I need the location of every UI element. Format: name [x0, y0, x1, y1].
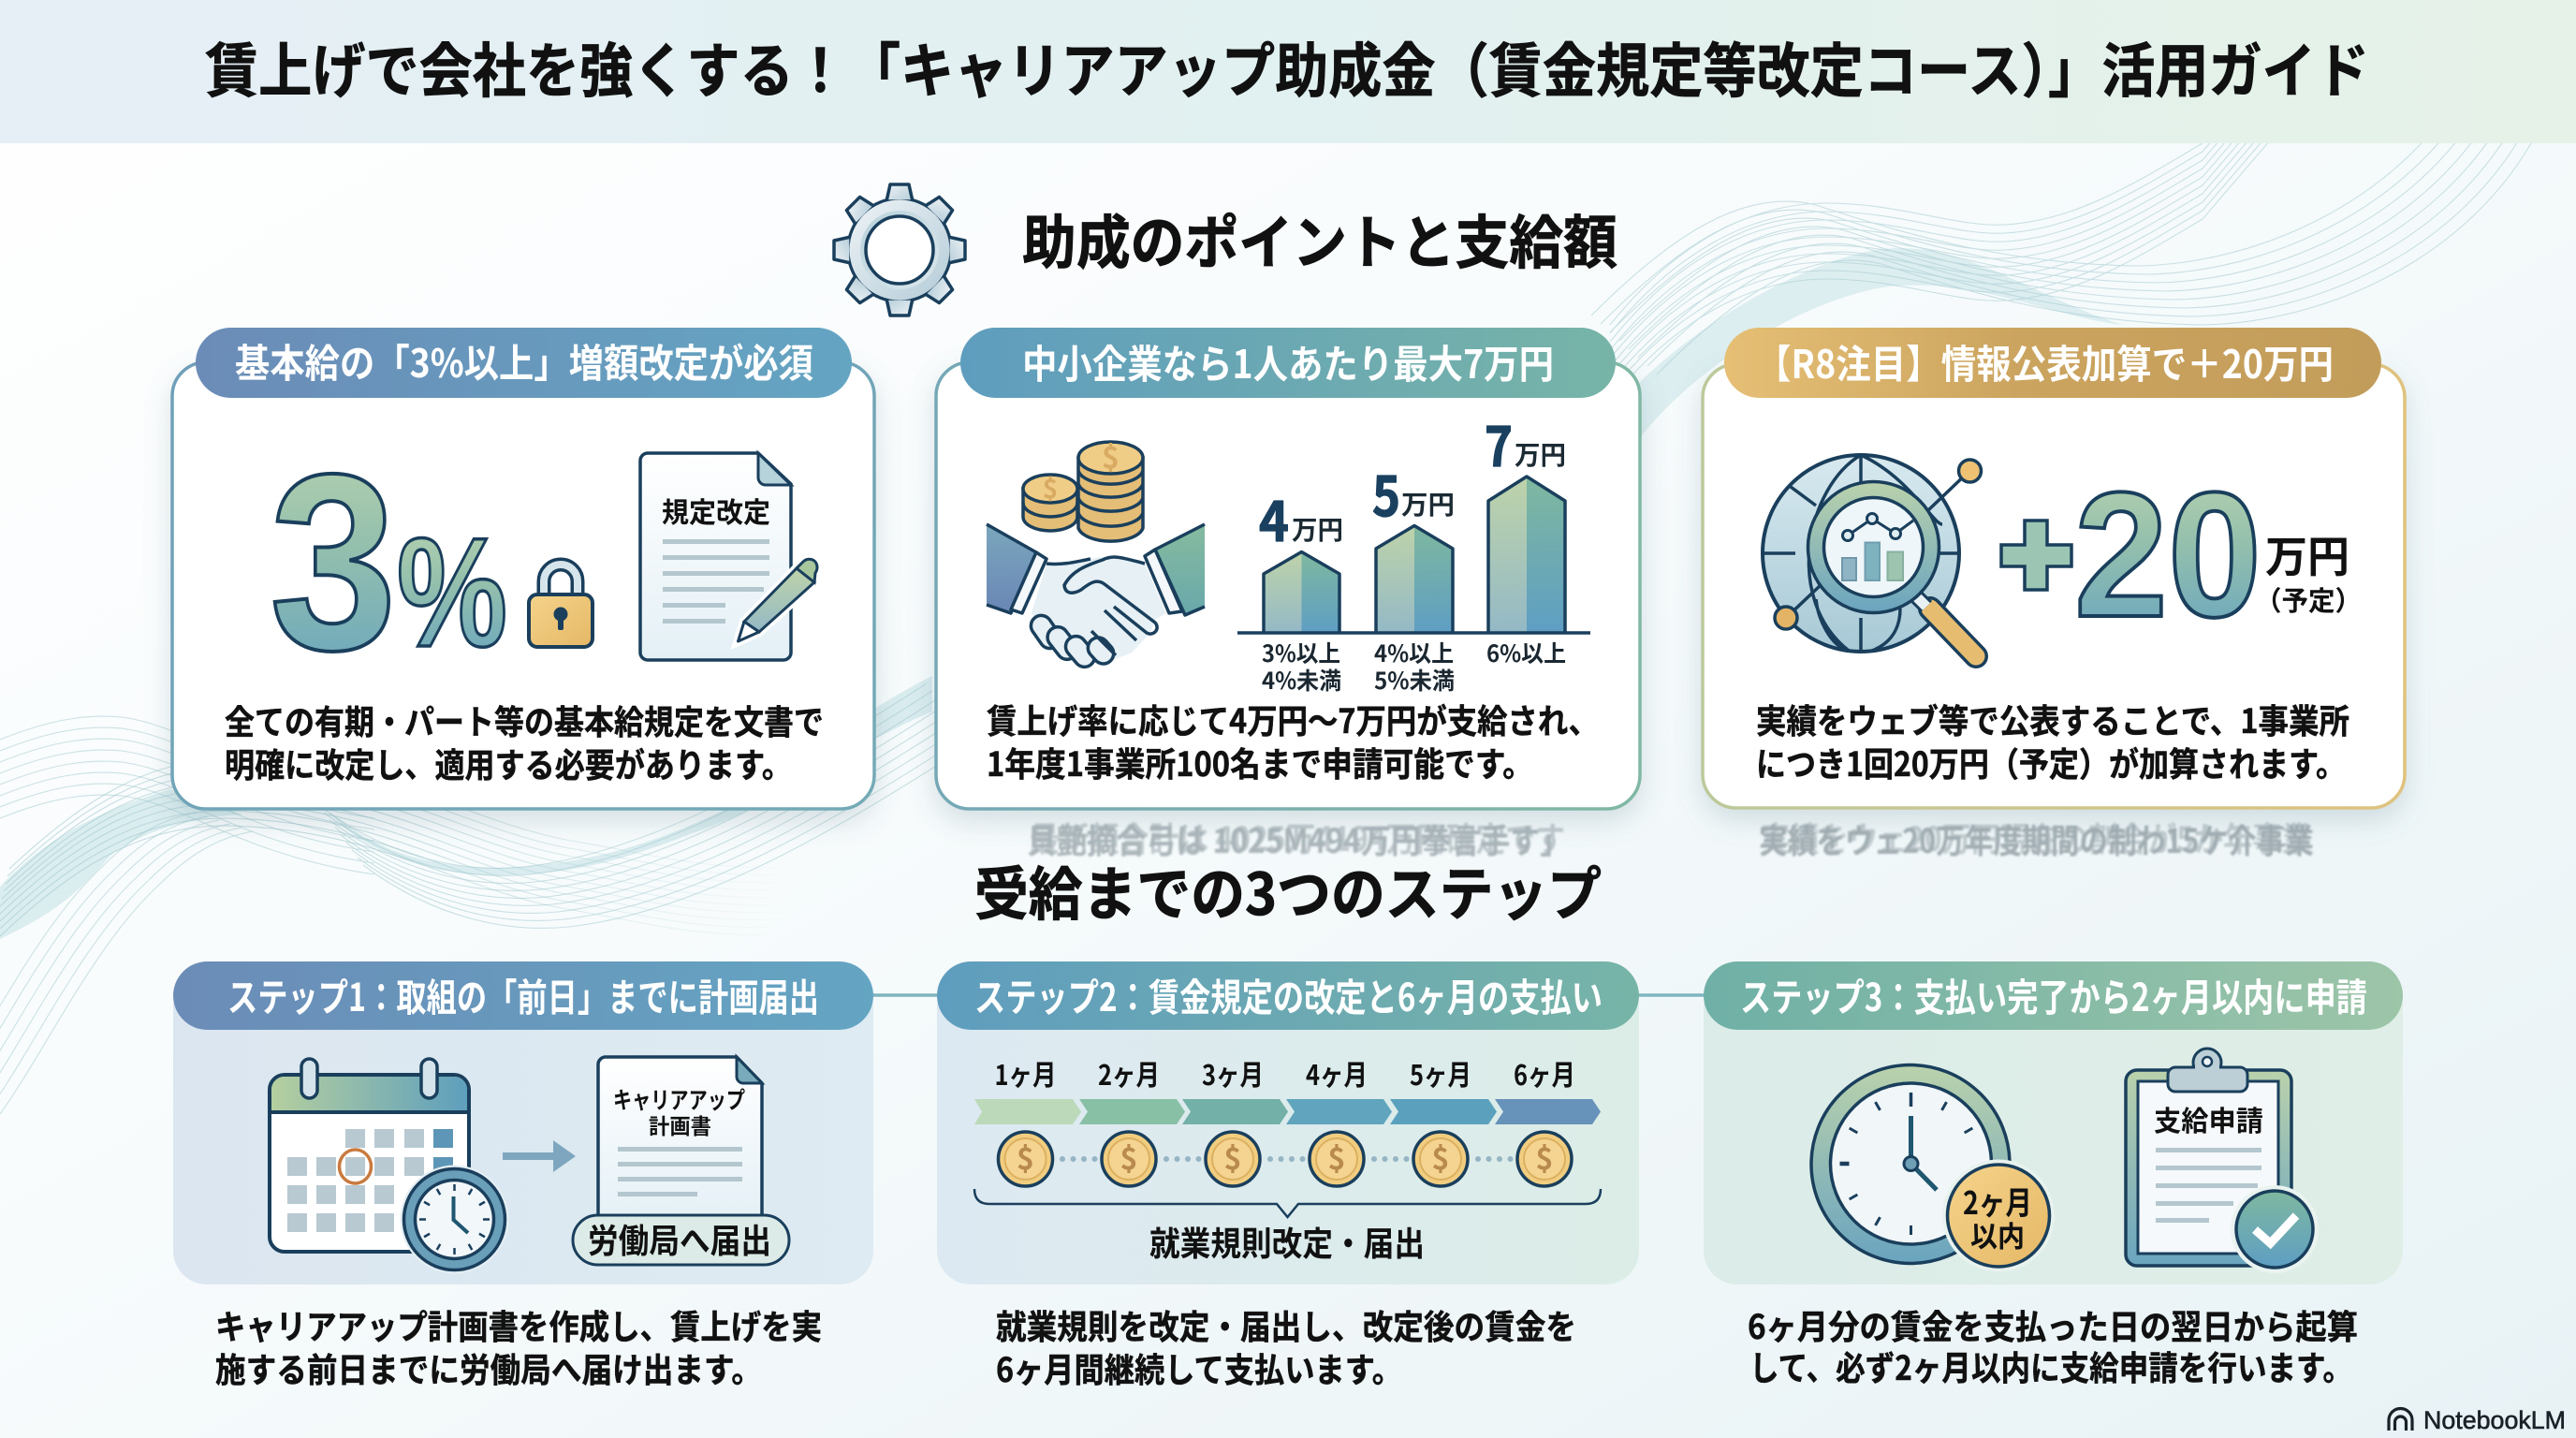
ghost text under card 3: 実績をウェ20万円現在の割合が5か年事業	[1761, 813, 2311, 861]
icon: application clipboard: 支給申請	[2154, 1098, 2263, 1139]
card 3 heading pill: 【R8注目】情報公表加算で＋20万円	[1756, 333, 2334, 390]
card 3 description: 実績をウェブ等で公表することで、1事業所	[1756, 695, 2349, 743]
bar labels: 4%以上	[1374, 636, 1454, 669]
card 2 heading pill: 中小企業なら1人あたり最大7万円	[1022, 333, 1554, 390]
icon: handshake	[987, 524, 1205, 671]
icon: clock small	[401, 1165, 509, 1273]
icon: coin stacks: $	[1043, 469, 1058, 506]
timeline chevrons	[974, 1099, 1601, 1124]
icon: regulation document: 規定改定	[662, 490, 770, 531]
icon: calendar	[270, 1059, 469, 1252]
bar: 40,000 yen	[1259, 478, 1343, 633]
ghost text under card 2: 貝艶摘合弓は 1025M494万円拳言手す」	[1027, 814, 1570, 863]
month labels: 5ヶ月	[1410, 1052, 1471, 1093]
panel: card 3 R8 disclosure bonus	[1703, 328, 2405, 808]
step 2 description: 6ヶ月間継続して支払います。	[996, 1343, 1402, 1392]
dotted links	[1062, 1156, 1511, 1162]
heading: points and amounts: 助成のポイントと支給額	[1022, 196, 1617, 280]
card 2 description: 1年度1事業所100名まで申請可能です。	[987, 738, 1533, 786]
icon: large clock	[1811, 1065, 2010, 1264]
big 3 percent figure	[270, 421, 507, 702]
card 1 description	[225, 696, 824, 787]
icon: career-up plan document: 計画書	[649, 1108, 711, 1140]
month labels: 3ヶ月	[1202, 1052, 1264, 1093]
panel: card 2 up to 70,000 yen	[936, 328, 1640, 809]
bar labels: 5%未満	[1374, 663, 1455, 697]
step 3 heading pill	[1704, 961, 2403, 1030]
bar labels: 4%未満	[1262, 663, 1341, 697]
month labels: 4ヶ月	[1306, 1052, 1368, 1093]
step 2 description	[996, 1300, 1576, 1392]
month labels: 2ヶ月	[1098, 1052, 1160, 1093]
heading: three steps: 受給までの3つのステップ	[974, 847, 1602, 932]
step 2 description: 就業規則を改定・届出し、改定後の賃金を	[996, 1300, 1576, 1349]
background wave pattern	[0, 25, 2565, 1114]
bar labels	[1262, 636, 1566, 697]
bar: 70,000 yen: 7	[1485, 404, 1513, 482]
panel: step 2	[937, 961, 1639, 1284]
label: submit to labor bureau: 労働局へ届出	[588, 1214, 771, 1263]
logo: NotebookLM: NotebookLM	[2423, 1406, 2566, 1434]
monthly wage coins	[998, 1132, 1572, 1186]
monthly wage coins: $	[1017, 1136, 1034, 1179]
bar labels: 6%以上	[1486, 636, 1566, 669]
card 1 heading pill: 基本給の「3%以上」増額改定が必須	[235, 332, 813, 389]
icon: padlock	[529, 565, 593, 647]
step 3 heading pill: ステップ3：支払い完了から2ヶ月以内に申請	[1740, 966, 2367, 1022]
step 1 heading pill	[173, 961, 873, 1030]
step 2 heading pill: ステップ2：賃金規定の改定と6ヶ月の支払い	[974, 966, 1603, 1022]
card 1 description: 全ての有期・パート等の基本給規定を文書で	[225, 696, 824, 744]
header band	[0, 0, 2576, 143]
big +20 figure: （予定）	[2255, 580, 2362, 619]
panel: step 3	[1704, 961, 2403, 1284]
step 3 description	[1748, 1300, 2358, 1390]
icon: career-up plan document	[598, 1057, 762, 1222]
monthly wage coins: $	[1120, 1136, 1137, 1179]
card 1 description: 明確に改定し、適用する必要があります。	[225, 739, 792, 787]
ghost text under card 3: 実績をウェ20万年度期間の制わ15ケ介事業	[1759, 814, 2314, 863]
step 3 description: して、必ず2ヶ月以内に支給申請を行います。	[1749, 1342, 2352, 1390]
connector between steps	[871, 993, 1707, 997]
step 3 description: 6ヶ月分の賃金を支払った日の翌日から起算	[1748, 1300, 2358, 1349]
step 2 heading pill	[937, 961, 1639, 1030]
icon: regulation document	[640, 453, 817, 660]
panel: step 1	[173, 961, 873, 1284]
bar: 40,000 yen: 万円	[1292, 510, 1343, 548]
icon: coin stacks	[1023, 434, 1143, 541]
big 3 percent figure: 3	[270, 421, 397, 702]
month labels: 6ヶ月	[1514, 1052, 1575, 1093]
brace label: 就業規則改定・届出	[1149, 1217, 1425, 1266]
icon: career-up plan document: キャリアアップ	[613, 1082, 745, 1116]
monthly wage coins: $	[1328, 1136, 1345, 1179]
badge: within 2 months: 以内	[1970, 1213, 2025, 1255]
step 1 description	[215, 1300, 822, 1392]
title: 賃上げで会社を強くする！「キャリアアップ助成金（賃金規定等改定コース）」活用ガイド	[205, 24, 2369, 110]
icon: coin stacks: $	[1102, 434, 1120, 477]
month labels: 1ヶ月	[994, 1052, 1056, 1093]
card 2 description	[987, 695, 1599, 786]
icon: gear	[834, 184, 965, 315]
bar: 40,000 yen: 4	[1259, 478, 1289, 557]
icon: application clipboard	[2126, 1049, 2319, 1273]
bar labels: 3%以上	[1262, 636, 1340, 669]
monthly wage coins: $	[1432, 1136, 1449, 1179]
bar: 70,000 yen	[1485, 404, 1566, 633]
bar: 50,000 yen: 万円	[1401, 485, 1455, 522]
step 1 heading pill: ステップ1：取組の「前日」までに計画届出	[227, 966, 819, 1022]
month labels	[994, 1052, 1575, 1093]
arrow: calendar to plan	[503, 1140, 576, 1172]
ghost text under card 2: 最新額合計は 4025万4194万円確定です	[1030, 813, 1565, 861]
bar: 50,000 yen: 5	[1372, 453, 1400, 532]
card 3 description	[1756, 695, 2349, 786]
big 3 percent figure: %	[397, 506, 507, 680]
bar chart: subsidy by raise rate	[1237, 404, 1590, 697]
card 3 description: につき1回20万円（予定）が加算されます。	[1756, 738, 2346, 786]
card 2 description: 賃上げ率に応じて4万円～7万円が支給され、	[987, 695, 1599, 743]
big +20 figure: 万円	[2265, 523, 2349, 585]
step 1 description: キャリアアップ計画書を作成し、賃上げを実	[215, 1300, 822, 1349]
bar: 70,000 yen: 万円	[1515, 435, 1566, 473]
step 1 description: 施する前日までに労働局へ届け出ます。	[215, 1343, 762, 1392]
monthly wage coins: $	[1224, 1136, 1241, 1179]
icon: globe with magnifier	[1763, 455, 1981, 656]
big +20 figure	[2001, 456, 2362, 654]
badge: within 2 months	[1942, 1159, 2055, 1271]
bar: 50,000 yen	[1372, 453, 1455, 633]
brace	[974, 1189, 1601, 1217]
panel: card 1 basic pay	[172, 328, 874, 809]
big +20 figure: 20	[2074, 456, 2261, 654]
monthly wage coins: $	[1536, 1136, 1553, 1179]
badge: within 2 months: 2ヶ月	[1963, 1178, 2032, 1224]
